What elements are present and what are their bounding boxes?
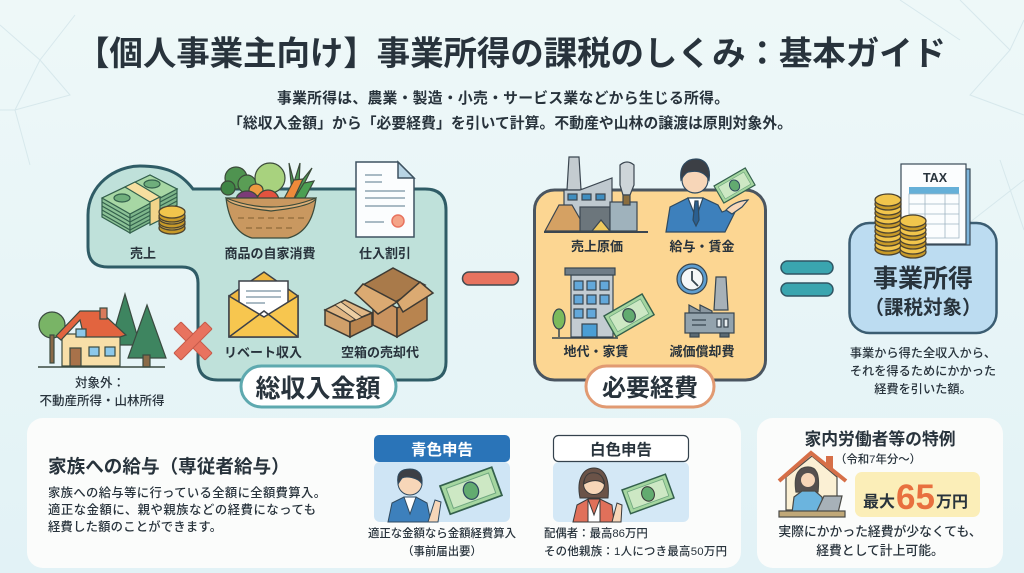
icon: home worker — [779, 453, 846, 517]
special rule text: 実際にかかった経費が少なくても、 — [778, 524, 982, 539]
callout: maximum amount — [855, 472, 980, 517]
intro text — [228, 89, 792, 132]
excluded income text: 対象外： — [75, 375, 125, 390]
heading: special rule: 家内労働者等の特例 — [804, 429, 956, 449]
label: depreciation: 減価償却費 — [669, 344, 735, 359]
icon: tax form and coins — [875, 164, 970, 258]
label: rebate income: リベート収入 — [224, 345, 302, 360]
title: 【個人事業主向け】事業所得の課税のしくみ：基本ガイド — [76, 36, 946, 73]
icon: woman with banknote — [573, 468, 674, 522]
icon: factory — [544, 157, 648, 232]
pill: required expenses — [586, 366, 714, 407]
heading: family salaries: 家族への給与（専従者給与） — [48, 456, 290, 477]
label: cost of sales: 売上原価 — [571, 239, 623, 254]
label: purchase discount: 仕入割引 — [359, 246, 411, 261]
family salaries text: 家族への給与等に行っている全額に全額費算入。 — [48, 485, 326, 500]
equals sign — [781, 261, 833, 296]
family salaries text — [48, 485, 326, 534]
label: applicable year: （令和7年分～） — [835, 452, 921, 466]
icon: document — [356, 162, 414, 237]
label: salaries: 給与・賃金 — [669, 239, 735, 254]
icon: office building with money — [552, 268, 654, 338]
pill: total revenue — [241, 366, 396, 407]
pill: required expenses: 必要経費 — [602, 375, 698, 402]
panel: business income — [850, 164, 996, 333]
caption: white return — [544, 526, 727, 558]
caption: blue return: 適正な金額なら金額経費算入 — [368, 526, 517, 540]
panel: home worker special rule — [757, 418, 1003, 568]
icon: tax form and coins: TAX — [923, 171, 948, 185]
label: own consumption: 商品の自家消費 — [224, 246, 316, 261]
excluded income text: 不動産所得・山林所得 — [39, 393, 165, 408]
label: sales: 売上 — [130, 246, 156, 261]
callout: maximum amount: 万円 — [936, 494, 968, 511]
card: white return — [544, 436, 727, 558]
icon: vegetable basket — [221, 163, 316, 238]
business income note — [850, 345, 996, 396]
label: sale of empty boxes: 空箱の売却代 — [341, 345, 419, 360]
caption: white return: その他親族：1人につき最高50万円 — [544, 544, 727, 558]
special rule text — [778, 524, 982, 558]
panel: total revenue — [88, 162, 446, 407]
intro text: 「総収入金額」から「必要経費」を引いて計算。不動産や山林の譲渡は原則対象外。 — [228, 114, 792, 132]
excluded income text — [39, 375, 165, 408]
family salaries text: 適正な金額に、親や親族などの経費になっても — [48, 502, 316, 517]
special rule text: 経費として計上可能。 — [816, 543, 944, 558]
callout: maximum amount: 65 — [896, 478, 935, 517]
icon: man with money — [666, 159, 755, 232]
card: blue return — [368, 435, 517, 558]
card: white return: 白色申告 — [590, 440, 652, 459]
icon: house and trees — [38, 294, 166, 367]
icon: money stack — [102, 175, 185, 234]
caption: blue return: （事前届出要） — [402, 544, 482, 558]
panel: required expenses — [534, 157, 766, 407]
callout: maximum amount: 最大 — [863, 493, 895, 511]
business income note: 事業から得た全収入から、 — [850, 345, 996, 360]
icon: clock and machine — [677, 264, 734, 337]
caption: white return: 配偶者：最高86万円 — [544, 526, 648, 540]
business income note: それを得るためにかかった — [850, 363, 996, 378]
icon: cross mark — [174, 322, 212, 360]
label: land rent: 地代・家賃 — [563, 344, 629, 359]
intro text: 事業所得は、農業・製造・小売・サービス業などから生じる所得。 — [277, 89, 729, 107]
icon: envelope — [229, 272, 298, 337]
icon: man with banknote — [388, 467, 502, 522]
pill: total revenue: 総収入金額 — [255, 375, 381, 403]
icon: cardboard boxes — [325, 268, 433, 337]
panel: family salaries — [27, 418, 741, 568]
caption: blue return — [368, 526, 517, 558]
heading: business income: 事業所得 — [873, 265, 973, 293]
minus sign — [462, 272, 518, 285]
business income note: 経費を引いた額。 — [874, 381, 972, 396]
card: blue return: 青色申告 — [411, 440, 473, 459]
family salaries text: 経費した額のことができます。 — [48, 519, 222, 534]
label: taxable: （課税対象） — [864, 297, 982, 319]
